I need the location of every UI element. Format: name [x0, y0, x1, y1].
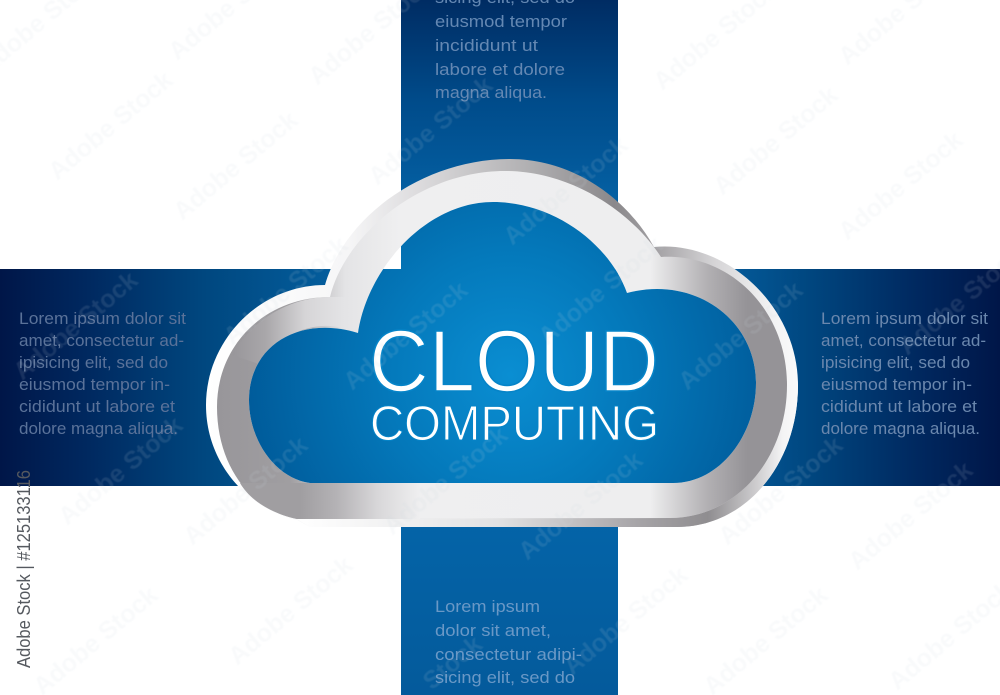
watermarks: Adobe Stock: [708, 81, 843, 201]
text block: bottom band: Lorem ipsum: [435, 598, 540, 616]
cloud: bevel face: [217, 171, 787, 519]
text block: left band: eiusmod tempor in-: [19, 376, 170, 394]
text block: top band: eiusmod tempor: [435, 13, 568, 31]
cloud: left lobe highlight: [232, 297, 345, 365]
title: CLOUD COMPUTING: COMPUTING: [370, 397, 659, 451]
watermarks: Adobe Stock: [168, 106, 303, 226]
watermarks: Adobe Stock: [498, 131, 633, 251]
text block: left band: dolore magna aliqua.: [19, 420, 178, 438]
watermarks: Adobe Stock: [673, 276, 808, 396]
text block: bottom band: dolor sit amet,: [435, 622, 551, 640]
cloud: lower rim shading: [297, 385, 798, 527]
watermarks: Adobe Stock: [533, 231, 668, 351]
text block: top band: incididunt ut: [435, 37, 538, 55]
text block: left band: cididunt ut labore et: [19, 398, 175, 416]
text block: top band: magna aliqua.: [435, 84, 547, 102]
cross background: vertical band bottom: [401, 486, 618, 695]
watermarks: Adobe Stock: [218, 231, 353, 351]
cloud: inner opening: [249, 202, 756, 483]
text block: right band: ipisicing elit, sed do: [821, 354, 970, 372]
text block: right band: amet, consectetur ad-: [821, 332, 986, 350]
text block: bottom band: consectetur adipi-: [435, 646, 582, 664]
cross background: horizontal band left: [0, 269, 401, 486]
watermarks: Adobe Stock: [843, 456, 978, 576]
text block: right band: Lorem ipsum dolor sit: [821, 310, 988, 328]
stock image id label: Adobe Stock | #125133116: [14, 470, 34, 668]
watermarks: Adobe Stock: [513, 446, 648, 566]
watermarks: Adobe Stock: [833, 126, 968, 246]
watermarks: Adobe Stock: [338, 276, 473, 396]
watermarks: Adobe Stock: [223, 551, 358, 671]
watermarks: Adobe Stock: [558, 561, 693, 681]
watermarks: Adobe Stock: [178, 431, 313, 551]
text block: top band: [435, 0, 575, 102]
title: CLOUD COMPUTING: CLOUD: [369, 313, 659, 410]
watermarks: Adobe Stock: [713, 431, 848, 551]
cross background: vertical band top: [401, 0, 618, 270]
watermarks: Adobe Stock: [378, 421, 513, 541]
text block: right band: [821, 310, 988, 438]
cloud: outer rim: [206, 159, 798, 527]
title: CLOUD COMPUTING: [369, 313, 659, 451]
watermarks: Adobe Stock: [8, 266, 143, 386]
text block: bottom band: sicing elit, sed do: [435, 669, 575, 687]
watermarks: Adobe Stock: [43, 66, 178, 186]
cloud: [206, 159, 798, 527]
text block: left band: amet, consectetur ad-: [19, 332, 184, 350]
cloud: lower left base shading: [240, 483, 420, 519]
text block: right band: eiusmod tempor in-: [821, 376, 972, 394]
text block: top band: labore et dolore: [435, 61, 565, 79]
cloud: blue cross seen through opening: [249, 202, 756, 483]
text block: left band: Lorem ipsum dolor sit: [19, 310, 186, 328]
text block: bottom band: [435, 598, 582, 687]
cross background: horizontal band right: [618, 269, 1000, 486]
watermarks: Adobe Stock: [53, 411, 188, 531]
watermarks: Adobe Stock: [363, 71, 498, 191]
text block: right band: dolore magna aliqua.: [821, 420, 980, 438]
text block: left band: ipisicing elit, sed do: [19, 354, 168, 372]
text block: right band: cididunt ut labore et: [821, 398, 977, 416]
text block: left band: [19, 310, 186, 438]
watermarks: Stock: [418, 630, 488, 695]
